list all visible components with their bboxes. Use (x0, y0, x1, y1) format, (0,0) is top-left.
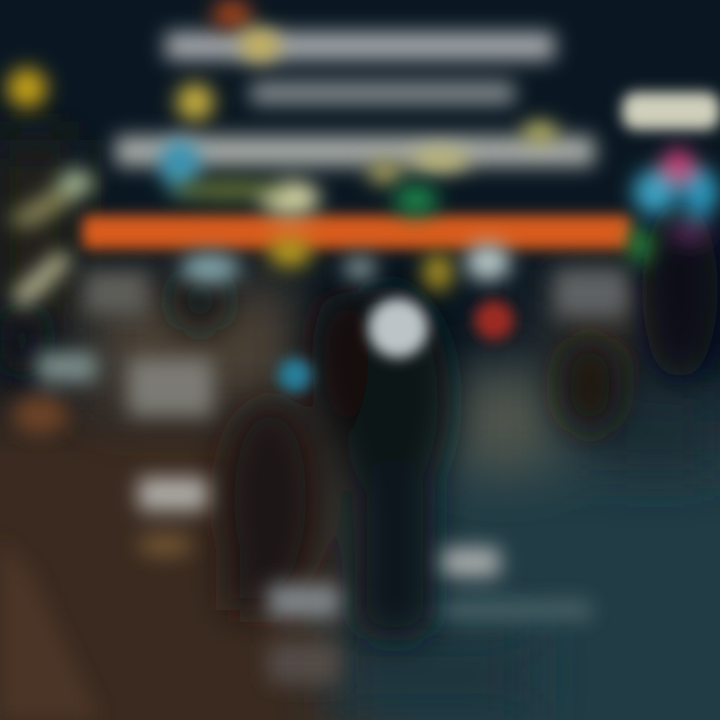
figure details (278, 298, 514, 392)
right colored icon (629, 149, 719, 265)
red circle (474, 300, 514, 340)
top accents (7, 0, 558, 191)
left icon shapes (5, 170, 98, 308)
small label blocks (12, 243, 627, 684)
orange banner (82, 215, 632, 249)
dark figures (0, 200, 718, 640)
heading text blur (115, 32, 595, 166)
white circle (368, 298, 428, 358)
right sign (622, 92, 720, 130)
heading line 2 (250, 82, 515, 104)
heading line 1 (165, 32, 555, 60)
banner accents (170, 180, 453, 291)
blue marker (278, 358, 312, 392)
brown wedge lower left (0, 540, 100, 720)
background: street floor (0, 340, 720, 720)
heading line 3 (115, 136, 595, 166)
